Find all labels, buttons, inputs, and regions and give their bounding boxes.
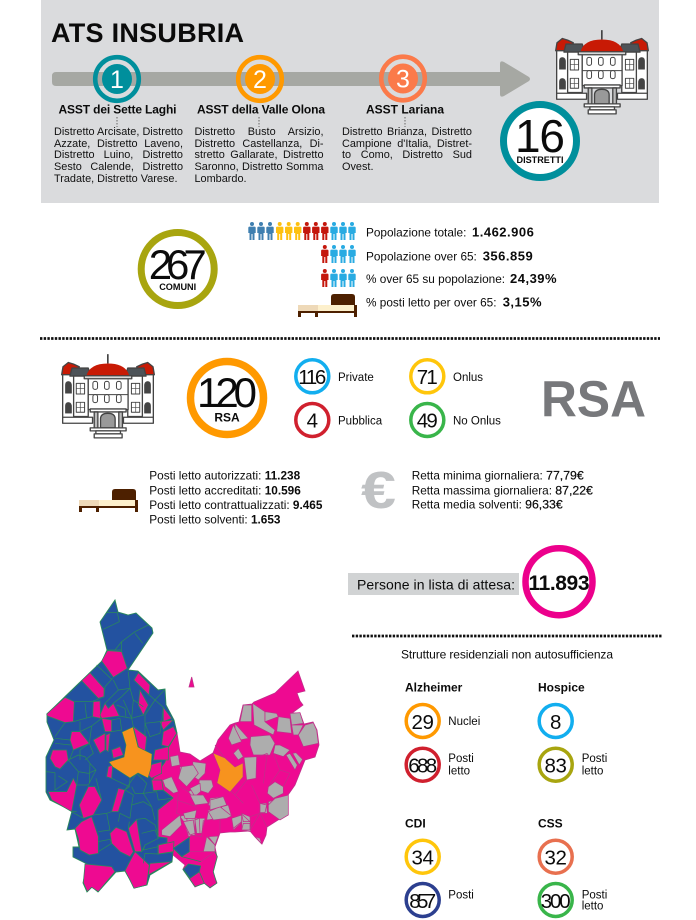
map: orange district east: [213, 753, 243, 792]
text block: distretti ASST Valle Olona: stretto Gallarate, Distretto: [194, 149, 324, 161]
group: CSS: 300: [541, 890, 571, 913]
text block: distretti ASST Lariana: Distretto Brianza, Distretto: [342, 126, 472, 138]
group: Hospice: 83: [544, 754, 567, 778]
text block: distretti ASST Lariana: Ovest.: [342, 161, 373, 173]
map: small island: [189, 677, 194, 687]
icons: people row percent: [321, 269, 356, 287]
group: Alzheimer: Posti: [448, 753, 474, 765]
map: [46, 600, 319, 892]
arrow: timeline: [52, 61, 530, 97]
badge: 267 comuni: COMUNI: [159, 282, 196, 293]
stat: popolazione over 65: 356.859: [483, 248, 533, 264]
badge: 116 private: Private: [338, 372, 374, 384]
group: CSS: letto: [582, 900, 603, 912]
group: CSS: Posti: [582, 889, 607, 901]
group: Alzheimer: Alzheimer: [405, 681, 463, 695]
icon: bed population: [298, 294, 357, 317]
badge: 49 no onlus: No Onlus: [453, 416, 501, 428]
text block: distretti ASST Valle Olona: [194, 126, 324, 185]
group: CDI: [405, 816, 474, 916]
stat: popolazione totale: Popolazione totale:: [366, 226, 466, 240]
badge: 16 distretti: 16: [515, 110, 565, 162]
heading: RSA: RSA: [541, 370, 646, 428]
text block: distretti ASST Sette Laghi: Azzate, Distretto Laveno,: [54, 138, 183, 150]
group: CDI: 34: [411, 846, 434, 870]
text block: posti letto: Posti letto contrattualizzati: 9.465: [149, 498, 323, 512]
stat: posti letto per over 65: [366, 294, 542, 310]
text block: rette: [412, 468, 593, 511]
heading: strutture residenziali: Strutture residenziali non autosufficienza: [401, 648, 613, 662]
text block: posti letto: Posti letto accreditati: 10.596: [149, 484, 301, 498]
badge: 120 RSA: 120: [197, 369, 257, 416]
badge: 267 comuni: 267: [149, 241, 207, 288]
group: Hospice: Hospice: [538, 681, 585, 695]
stat: popolazione over 65: Popolazione over 65:: [366, 250, 477, 264]
icon: building RSA: [62, 354, 154, 438]
badge: 116 private: 116: [298, 366, 326, 389]
group: CSS: 32: [544, 846, 567, 870]
stat: percent over 65: % over 65 su popolazione:: [366, 272, 505, 286]
group: Alzheimer: Nuclei: [448, 716, 480, 728]
stat: popolazione over 65: [366, 248, 533, 264]
icon: building top: [556, 30, 648, 114]
title: ATS INSUBRIA: [51, 18, 244, 48]
group: Hospice: [538, 681, 607, 781]
group: Hospice: Posti: [582, 753, 607, 765]
group: CSS: [538, 816, 607, 916]
text block: rette: Retta massima giornaliera: 87,22€: [412, 483, 593, 497]
stat: percent over 65: 24,39%: [510, 271, 557, 286]
step 1 badge: [95, 57, 139, 101]
map: orange district west: [109, 727, 152, 778]
badge: 4 pubblica: Pubblica: [338, 416, 383, 428]
text block: posti letto: [149, 468, 323, 526]
callout: lista di attesa: Persone in lista di attesa:: [357, 576, 515, 592]
stat: percent over 65: [366, 271, 557, 286]
step 1 badge: 1: [110, 66, 124, 94]
text block: distretti ASST Sette Laghi: Distretto Arcisate, Distretto: [54, 126, 183, 138]
text block: distretti ASST Sette Laghi: Sesto Calende, Distretto: [54, 161, 183, 173]
text block: distretti ASST Sette Laghi: Distretto Luino, Distretto: [54, 149, 183, 161]
badge: 71 onlus: [411, 360, 483, 393]
text block: distretti ASST Sette Laghi: Tradate, Distretto Varese.: [54, 173, 177, 185]
step 2 badge: [238, 57, 282, 101]
icons: people row over 65: [321, 245, 356, 263]
step 3 badge: 3: [396, 66, 410, 94]
text block: distretti ASST Lariana: Campione d'Italia, Distret-: [342, 138, 472, 150]
group: Alzheimer: letto: [448, 765, 470, 777]
callout: lista di attesa: [348, 548, 592, 615]
text block: distretti ASST Valle Olona: Saronno, Distretto Somma: [194, 161, 324, 173]
text block: distretti ASST Sette Laghi: [54, 126, 183, 185]
text block: distretti ASST Valle Olona: Distretto Castellanza, Di-: [194, 138, 324, 150]
text block: posti letto: Posti letto solventi: 1.653: [149, 512, 281, 526]
text block: rette: Retta minima giornaliera: 77,79€: [412, 468, 584, 482]
step 2 badge: 2: [253, 66, 267, 94]
badge: 16 distretti: DISTRETTI: [516, 155, 564, 166]
stat: popolazione totale: 1.462.906: [472, 224, 534, 240]
badge: 16 distretti: [504, 104, 576, 178]
badge: 116 private: [296, 360, 374, 393]
text block: distretti ASST Valle Olona: Lombardo.: [194, 173, 247, 185]
callout: lista di attesa: 11.893: [528, 572, 590, 595]
group: Alzheimer: [405, 681, 480, 781]
step 3 badge: [381, 57, 425, 100]
heading: ASST della Valle Olona: ASST della Valle Olona: [197, 102, 325, 116]
panel: header background: [41, 0, 659, 203]
group: CDI: CDI: [405, 816, 426, 830]
badge: 4 pubblica: [296, 404, 383, 436]
text block: rette: Retta media solventi: 96,33€: [412, 497, 563, 511]
badge: 267 comuni: [141, 232, 214, 306]
group: Alzheimer: 688: [408, 754, 437, 778]
icons: people row total: [248, 222, 356, 240]
badge: 120 RSA: [190, 362, 264, 434]
stat: posti letto per over 65: 3,15%: [503, 294, 542, 310]
badge: 49 no onlus: [411, 404, 501, 436]
icon: euro: €: [361, 462, 396, 520]
text block: posti letto: Posti letto autorizzati: 11.238: [149, 468, 301, 482]
text block: distretti ASST Valle Olona: Distretto Busto Arsizio,: [194, 126, 324, 138]
text block: distretti ASST Lariana: [342, 126, 472, 173]
group: Hospice: 8: [550, 711, 561, 734]
badge: 120 RSA: RSA: [214, 410, 240, 424]
icon: bed RSA: [79, 489, 138, 512]
badge: 49 no onlus: 49: [417, 410, 438, 432]
map: southern cells: [173, 837, 217, 888]
badge: 71 onlus: 71: [417, 366, 438, 389]
stat: popolazione totale: [366, 224, 534, 240]
heading: ASST Lariana: ASST Lariana: [366, 102, 444, 116]
group: Alzheimer: 29: [411, 711, 434, 734]
stat: posti letto per over 65: % posti letto per over 65:: [366, 296, 496, 310]
group: Hospice: letto: [582, 765, 603, 777]
group: CSS: CSS: [538, 816, 563, 830]
heading: ASST dei Sette Laghi: ASST dei Sette Laghi: [58, 102, 176, 116]
text block: distretti ASST Lariana: to Como, Distretto Sud: [342, 149, 472, 161]
badge: 71 onlus: Onlus: [453, 372, 483, 384]
group: CDI: 857: [409, 890, 436, 913]
badge: 4 pubblica: 4: [307, 410, 318, 432]
group: CDI: Posti: [448, 889, 474, 901]
